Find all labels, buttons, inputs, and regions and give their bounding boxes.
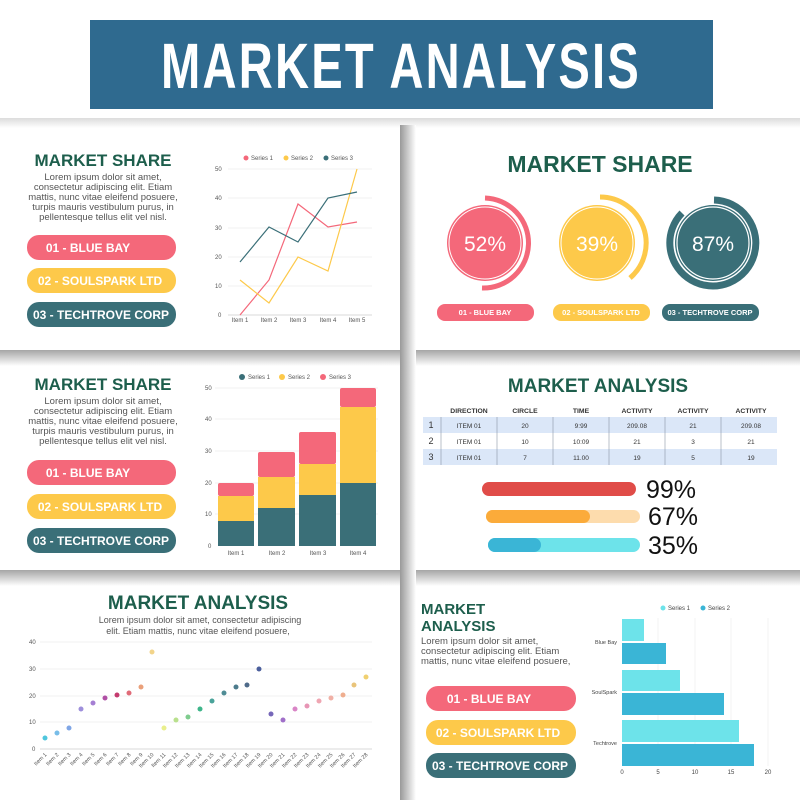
text block: turpis mauris vestibulum purus, in — [32, 202, 174, 213]
text block: elit. Etiam mattis, nunc vitae eleifend posuere, — [106, 626, 290, 636]
panel: market share stacked bar — [27, 374, 378, 557]
line chart: 10 — [215, 284, 222, 290]
table: 21 — [747, 439, 755, 446]
stacked bar chart: Item 2 — [269, 551, 286, 557]
table: 20 — [521, 423, 529, 430]
scatter chart: Item 13 — [174, 752, 191, 769]
donut 87% — [670, 200, 756, 286]
scatter chart: 20 — [29, 694, 36, 700]
panel: market analysis horizontal bars — [421, 601, 772, 778]
heading: MARKET ANALYSIS — [108, 593, 288, 614]
stacked bar chart: Item 1 — [228, 551, 245, 557]
pills: 03 - TECHTROVE CORP — [432, 759, 568, 773]
text block — [28, 396, 178, 447]
scatter chart: Item 11 — [150, 752, 167, 769]
table: 21 — [633, 439, 641, 446]
table: ACTIVITY — [622, 408, 653, 415]
heading: MARKET SHARE — [35, 151, 171, 170]
heading: MARKET ANALYSIS — [508, 376, 688, 397]
heading: MARKET — [421, 601, 485, 618]
donut 39% — [559, 197, 646, 281]
scatter chart: Item 4 — [69, 752, 84, 767]
stacked bar chart: Series 1 — [248, 375, 271, 381]
horizontal bar chart: 5 — [656, 770, 660, 776]
scatter chart: Item 5 — [81, 752, 96, 767]
text block — [99, 615, 301, 636]
text block: turpis mauris vestibulum purus, in — [32, 426, 174, 437]
table: 19 — [633, 455, 641, 462]
table — [423, 408, 777, 465]
stacked bar chart: 50 — [205, 386, 212, 392]
title banner — [90, 20, 713, 109]
table: 19 — [747, 455, 755, 462]
scatter chart: Item 28 — [352, 752, 369, 769]
scatter chart: 0 — [32, 747, 36, 753]
table: ACTIVITY — [736, 408, 767, 415]
stacked bar chart: Item 4 — [350, 551, 367, 557]
scatter chart: Item 7 — [105, 752, 120, 767]
scatter chart: Item 17 — [222, 752, 239, 769]
scatter chart: Item 16 — [210, 752, 227, 769]
line chart: 30 — [215, 226, 222, 232]
progress bars: 35% — [648, 532, 698, 560]
horizontal bar chart: 20 — [765, 770, 772, 776]
labels — [437, 304, 759, 321]
panel: market analysis table — [423, 376, 777, 560]
table: 209.08 — [627, 423, 647, 430]
table: 3 — [428, 452, 434, 462]
text block: mattis, nunc vitae eleifend posuere, — [28, 416, 178, 427]
line chart: 40 — [215, 196, 222, 202]
line chart: Series 2 — [291, 156, 314, 162]
stacked bar chart: 10 — [205, 512, 212, 518]
table: TIME — [573, 408, 590, 415]
line chart: Item 5 — [349, 318, 366, 324]
line chart: Series 3 — [331, 156, 354, 162]
labels: 02 - SOULSPARK LTD — [562, 308, 640, 317]
text block: Lorem ipsum dolor sit amet, — [44, 396, 162, 407]
scatter chart: Item 10 — [138, 752, 155, 769]
horizontal bar chart — [592, 606, 772, 776]
text block — [421, 636, 570, 667]
pills: 01 - BLUE BAY — [447, 692, 531, 706]
table: 10 — [521, 439, 529, 446]
pills: 01 - BLUE BAY — [46, 241, 130, 255]
line chart: 0 — [218, 313, 222, 319]
scatter chart: Item 3 — [57, 752, 72, 767]
panel: market share line chart — [27, 151, 372, 327]
scatter chart: Item 26 — [329, 752, 346, 769]
heading: MARKET SHARE — [35, 375, 171, 394]
panel: market analysis scatter — [29, 593, 372, 769]
donut 39%: 39% — [576, 233, 618, 256]
heading: MARKET SHARE — [507, 151, 693, 177]
table: 209.08 — [741, 423, 761, 430]
scatter chart: Item 12 — [162, 752, 179, 769]
heading: ANALYSIS — [421, 618, 495, 635]
line chart: 50 — [215, 167, 222, 173]
text block: consectetur adipiscing elit. Etiam — [34, 406, 172, 417]
pills: 03 - TECHTROVE CORP — [33, 308, 169, 322]
donut 87%: 87% — [692, 233, 734, 256]
stacked bar chart: Item 3 — [310, 551, 327, 557]
scatter chart: 30 — [29, 667, 36, 673]
text block: mattis, nunc vitae eleifend posuere, — [421, 656, 570, 667]
progress bars — [482, 476, 698, 560]
horizontal bar chart: SoulSpark — [592, 690, 617, 696]
stacked bar chart: 40 — [205, 417, 212, 423]
text block: pellentesque tellus elit vel nisl. — [39, 212, 167, 223]
table: ACTIVITY — [678, 408, 709, 415]
horizontal bar chart: Series 2 — [708, 606, 731, 612]
scatter chart: Item 9 — [129, 752, 144, 767]
progress bars: 99% — [646, 476, 696, 504]
horizontal bar chart: 10 — [692, 770, 699, 776]
table: 11.00 — [573, 455, 589, 462]
text block: consectetur adipiscing elit. Etiam — [421, 646, 559, 657]
scatter chart: Item 23 — [293, 752, 310, 769]
horizontal bar chart: Series 1 — [668, 606, 691, 612]
pills — [426, 686, 576, 778]
horizontal bar chart: Blue Bay — [595, 640, 617, 646]
stacked bar chart: Series 2 — [288, 375, 311, 381]
text block — [28, 172, 178, 223]
table: 1 — [428, 420, 434, 430]
stacked bar chart: 30 — [205, 449, 212, 455]
heading — [421, 601, 495, 635]
scatter chart: Item 27 — [340, 752, 357, 769]
scatter chart — [29, 640, 372, 769]
horizontal bar chart: 0 — [620, 770, 624, 776]
scatter chart: Item 1 — [33, 752, 48, 767]
table: 9:99 — [575, 423, 588, 430]
donut 52% — [447, 198, 528, 288]
scatter chart: 10 — [29, 720, 36, 726]
labels: 01 - BLUE BAY — [459, 308, 511, 317]
text block: mattis, nunc vitae eleifend posuere, — [28, 192, 178, 203]
text block: consectetur adipiscing elit. Etiam — [34, 182, 172, 193]
stacked bar chart: 20 — [205, 481, 212, 487]
scatter chart: Item 15 — [198, 752, 215, 769]
pills: 03 - TECHTROVE CORP — [33, 534, 169, 548]
donut 52%: 52% — [464, 233, 506, 256]
text block: pellentesque tellus elit vel nisl. — [39, 436, 167, 447]
scatter chart: Item 2 — [45, 752, 60, 767]
pills — [27, 460, 176, 553]
title banner: MARKET ANALYSIS — [161, 30, 641, 102]
scatter chart: Item 24 — [305, 752, 322, 769]
line chart: Item 2 — [261, 318, 278, 324]
line chart — [215, 156, 372, 324]
scatter chart: Item 18 — [233, 752, 250, 769]
scatter chart: Item 25 — [317, 752, 334, 769]
scatter chart: 40 — [29, 640, 36, 646]
scatter chart: Item 8 — [117, 752, 132, 767]
stacked bar chart: Series 3 — [329, 375, 352, 381]
scatter chart: Item 19 — [245, 752, 262, 769]
stacked bar chart — [205, 374, 378, 557]
line chart: Item 3 — [290, 318, 307, 324]
pills: 02 - SOULSPARK LTD — [38, 274, 162, 288]
table: 21 — [689, 423, 697, 430]
scatter chart: Item 20 — [257, 752, 274, 769]
scatter chart: Item 22 — [281, 752, 298, 769]
table: 5 — [691, 455, 695, 462]
scatter chart: Item 14 — [186, 752, 203, 769]
table: 7 — [523, 455, 527, 462]
table: CIRCLE — [512, 408, 538, 415]
horizontal bar chart: 15 — [728, 770, 735, 776]
scatter chart: Item 6 — [93, 752, 108, 767]
progress bars: 67% — [648, 503, 698, 531]
table: 3 — [691, 439, 695, 446]
table: 10:09 — [573, 439, 590, 446]
labels: 03 - TECHTROVE CORP — [667, 308, 753, 317]
line chart: Item 4 — [320, 318, 337, 324]
pills: 01 - BLUE BAY — [46, 466, 130, 480]
line chart: Item 1 — [232, 318, 249, 324]
pills: 02 - SOULSPARK LTD — [38, 500, 162, 514]
table: ITEM 01 — [457, 423, 482, 430]
table: ITEM 01 — [457, 439, 482, 446]
line chart: Series 1 — [251, 156, 274, 162]
horizontal bar chart: Techtrove — [593, 741, 617, 747]
pills — [27, 235, 176, 327]
text block: Lorem ipsum dolor sit amet, — [421, 636, 538, 647]
scatter chart: Item 21 — [269, 752, 286, 769]
table: 2 — [428, 436, 434, 446]
table: DIRECTION — [450, 408, 488, 415]
line chart: 20 — [215, 255, 222, 261]
panel: market share donuts — [437, 151, 759, 321]
pills: 02 - SOULSPARK LTD — [436, 726, 560, 740]
stacked bar chart: 0 — [208, 544, 212, 550]
text block: Lorem ipsum dolor sit amet, — [44, 172, 162, 183]
table: ITEM 01 — [457, 455, 482, 462]
text block: Lorem ipsum dolor sit amet, consectetur adipiscing — [99, 615, 301, 625]
